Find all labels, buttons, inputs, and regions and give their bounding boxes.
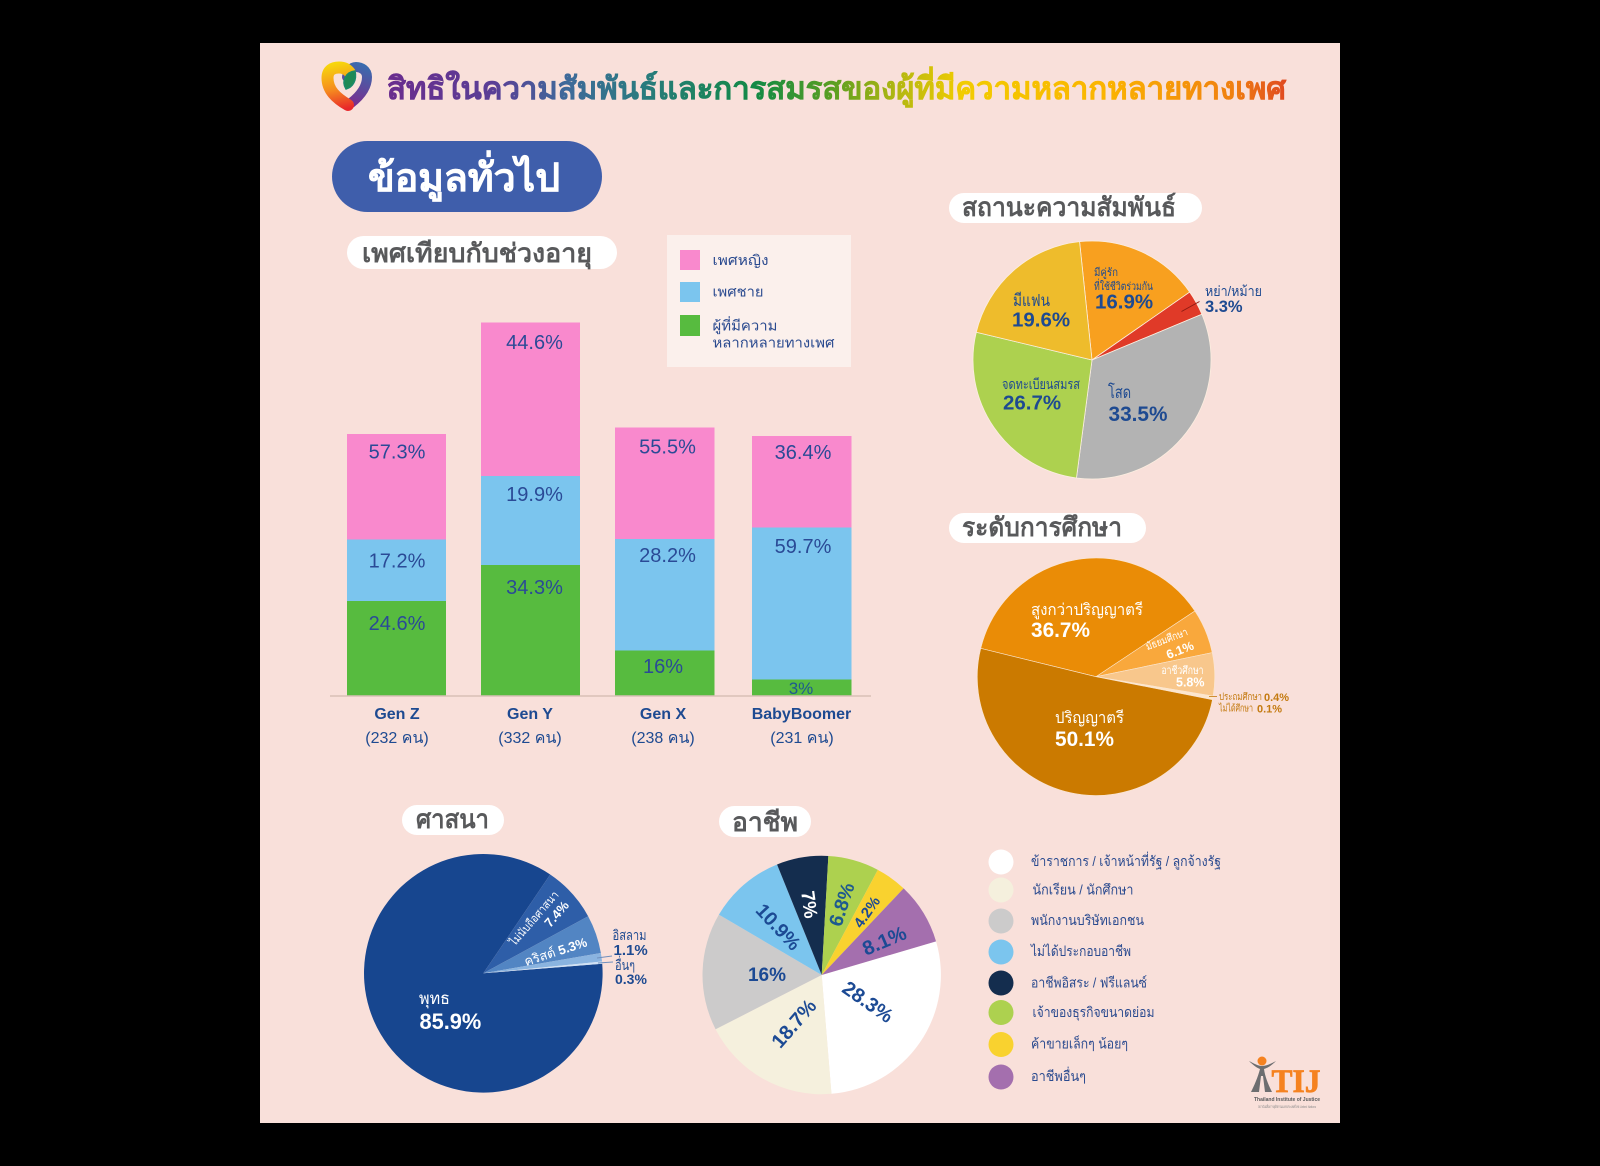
pie chart: occupation <box>703 856 941 1094</box>
bar: Gen X <box>615 428 714 747</box>
legend: occupation: อาชีพอิสระ / ฟรีแลนซ์ <box>1031 974 1147 990</box>
labels: education level: 50.1% <box>1055 728 1114 751</box>
labels: small education slices: ประถมศึกษา <box>1219 691 1262 703</box>
labels: occupation percentages <box>748 880 910 1053</box>
bar: Gen X: 55.5% <box>639 436 696 458</box>
bar: Gen Z: (232 คน) <box>365 730 429 747</box>
labels: religion: 0.3% <box>615 971 647 987</box>
legend: gender <box>667 235 851 367</box>
bar: Gen Z <box>347 434 446 747</box>
legend: gender: หลากหลายทางเพศ <box>712 334 835 350</box>
bar: BabyBoomer: BabyBoomer <box>752 706 851 723</box>
legend: occupation: อาชีพอื่นๆ <box>1031 1067 1086 1084</box>
labels: relationship status: หย่า/หม้าย <box>1205 283 1262 299</box>
labels: occupation percentages: 10.9% <box>751 900 805 955</box>
bar: Gen Y: 44.6% <box>506 332 563 354</box>
labels: religion: ไม่นับถือศาสนา <box>507 889 562 949</box>
heading: occupation: อาชีพ <box>732 807 798 837</box>
legend: occupation: ไม่ได้ประกอบอาชีพ <box>1030 943 1131 959</box>
bar chart: gender by generation <box>347 322 852 747</box>
bar: Gen Z: Gen Z <box>374 706 420 723</box>
labels: small education slices: 0.1% <box>1257 704 1282 716</box>
labels: relationship status: 16.9% <box>1095 290 1153 314</box>
labels: religion: คริสต์ 5.3% <box>522 934 589 969</box>
bar: BabyBoomer: 3% <box>789 679 813 698</box>
legend: occupation: เจ้าของธุรกิจขนาดย่อม <box>1032 1004 1154 1021</box>
legend: occupation <box>988 850 1221 1090</box>
heading: general information: ข้อมูลทั่วไป <box>368 150 560 202</box>
labels: occupation percentages: 16% <box>748 965 786 986</box>
labels: occupation percentages: 18.7% <box>768 995 822 1053</box>
heading: general information <box>332 141 602 212</box>
labels: occupation percentages: 6.8% <box>825 880 860 929</box>
labels: religion <box>419 889 648 1034</box>
heading: occupation <box>719 806 811 837</box>
bar: BabyBoomer: 59.7% <box>775 536 832 558</box>
pie chart: relationship status <box>973 241 1211 479</box>
labels: relationship status: ที่ใช้ชีวิตร่วมกัน <box>1094 278 1153 293</box>
bar: Gen Y: 34.3% <box>506 577 563 599</box>
labels: religion: อิสลาม <box>612 927 646 943</box>
labels: education level: 36.7% <box>1031 619 1090 642</box>
legend: occupation: ข้าราชการ / เจ้าหน้าที่รัฐ / ลูกจ้างรัฐ <box>1031 852 1221 870</box>
pie chart: education level <box>977 558 1215 796</box>
labels: relationship status: 33.5% <box>1108 403 1167 426</box>
pie chart: religion <box>364 854 603 1093</box>
legend: gender: ผู้ที่มีความ <box>712 316 778 334</box>
labels: occupation percentages: 8.1% <box>859 922 910 961</box>
labels: religion: 85.9% <box>420 1009 481 1034</box>
labels: education level <box>1031 601 1204 751</box>
labels: small education slices <box>1209 691 1289 716</box>
labels: relationship status: จดทะเบียนสมรส <box>1002 376 1080 392</box>
labels: relationship status: มีแฟน <box>1013 291 1050 310</box>
labels: education level: มัธยมศึกษา <box>1144 626 1190 653</box>
labels: education level: 6.1% <box>1164 639 1196 662</box>
legend: occupation: พนักงานบริษัทเอกชน <box>1031 912 1144 928</box>
legend: gender: เพศชาย <box>712 284 764 300</box>
labels: occupation percentages: 4.2% <box>851 894 884 931</box>
bar: Gen Y: Gen Y <box>507 706 553 723</box>
labels: occupation percentages: 28.3% <box>838 977 897 1028</box>
labels: relationship status: 19.6% <box>1012 308 1070 332</box>
bar: Gen X: 16% <box>643 656 683 678</box>
logo: TIJ <box>1249 1056 1320 1110</box>
bar: BabyBoomer: 36.4% <box>775 442 832 464</box>
labels: education level: สูงกว่าปริญญาตรี <box>1031 601 1143 620</box>
labels: relationship status: 3.3% <box>1205 298 1243 316</box>
bar: Gen X: (238 คน) <box>631 730 695 747</box>
logo: TIJ: Thailand Institute of Justice <box>1254 1097 1320 1103</box>
labels: religion: 7.4% <box>541 898 572 930</box>
labels: relationship status: 26.7% <box>1003 392 1061 414</box>
bar: BabyBoomer <box>752 436 852 747</box>
legend: occupation: นักเรียน / นักศึกษา <box>1032 882 1134 898</box>
heading: gender by age: เพศเทียบกับช่วงอายุ <box>362 238 592 270</box>
title: สิทธิในความสัมพันธ์และการสมรสของผู้ที่มีความหลากหลายทางเพศ <box>387 66 1287 108</box>
bar: Gen Z: 24.6% <box>369 613 426 635</box>
labels: religion: อื่นๆ <box>615 956 635 973</box>
labels: relationship status: มีคู่รัก <box>1094 266 1118 279</box>
labels: occupation percentages: 7% <box>796 890 821 920</box>
labels: small education slices: ไม่ได้ศึกษา <box>1218 702 1253 714</box>
labels: religion: 1.1% <box>614 942 648 959</box>
labels: education level: ปริญญาตรี <box>1055 709 1124 727</box>
labels: religion: พุทธ <box>419 989 450 1009</box>
bar: Gen Y: 19.9% <box>506 484 563 506</box>
heading: education level: ระดับการศึกษา <box>962 512 1122 542</box>
labels: small education slices: 0.4% <box>1264 692 1289 704</box>
labels: education level: อาชีวศึกษา <box>1162 664 1204 677</box>
legend: gender: เพศหญิง <box>712 252 768 268</box>
labels: relationship status <box>1002 266 1262 426</box>
heading: religion: ศาสนา <box>416 804 489 834</box>
bar: Gen Z: 57.3% <box>369 442 426 464</box>
bar: Gen Z: 17.2% <box>369 550 426 572</box>
bar: Gen X: Gen X <box>640 706 686 723</box>
bar: Gen Y <box>481 322 580 747</box>
logo: TIJ: สถาบันเพื่อการยุติธรรมแห่งประเทศไทย United Nations <box>1258 1104 1316 1110</box>
panel: background <box>260 43 1340 1123</box>
bar: Gen X: 28.2% <box>639 545 696 567</box>
labels: education level: 5.8% <box>1176 676 1204 690</box>
bar: Gen Y: (332 คน) <box>498 730 562 747</box>
logo: TIJ: TIJ <box>1272 1064 1320 1100</box>
heading: relationship status: สถานะความสัมพันธ์ <box>962 192 1176 222</box>
bar: BabyBoomer: (231 คน) <box>770 730 834 747</box>
icon: rainbow heart logo <box>328 67 367 105</box>
labels: relationship status: โสด <box>1108 382 1131 402</box>
legend: occupation: ค้าขายเล็กๆ น้อยๆ <box>1031 1034 1128 1052</box>
